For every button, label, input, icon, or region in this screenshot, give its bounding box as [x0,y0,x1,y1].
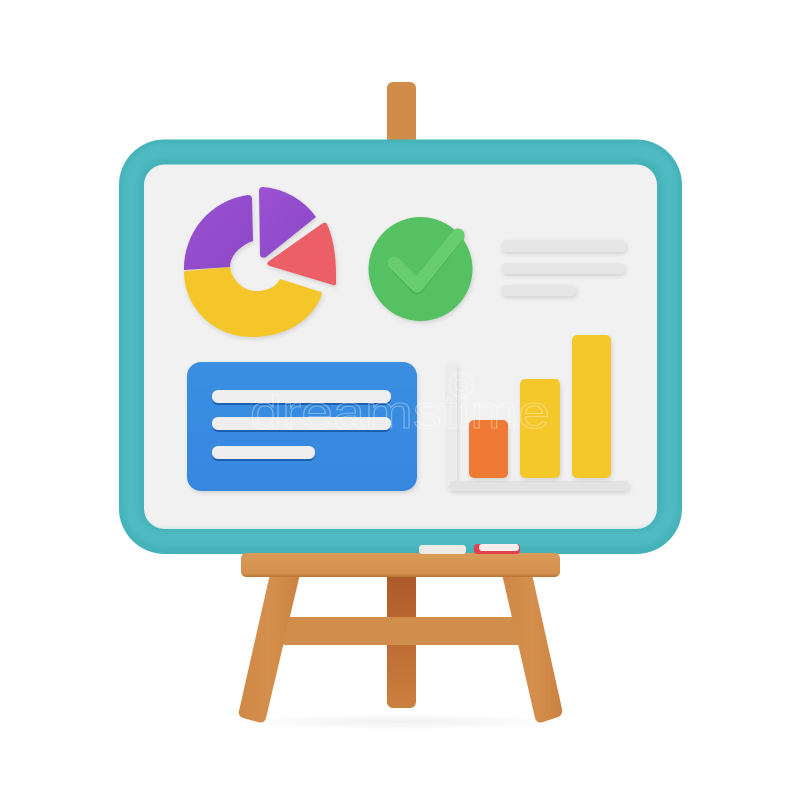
purple left segment [184,195,253,270]
donut pie chart [184,187,336,337]
crossbar [283,617,519,645]
blue text card [187,362,417,491]
easel legs and crossbar [239,570,562,722]
right text placeholder lines [501,240,626,296]
left leg [239,574,300,722]
watermark: dreamstime [250,386,550,438]
right leg [502,574,562,722]
red chalk [474,544,520,554]
easel shelf [241,553,560,577]
red segment [267,223,336,285]
centre leg [387,570,416,708]
watermark [250,373,550,438]
bars [469,335,611,478]
chart axes [447,363,629,491]
bar chart [447,335,629,491]
green check badge [368,217,472,321]
easel top post [387,82,416,144]
check mark [394,235,458,288]
purple right segment [259,187,316,258]
yellow segment [184,267,322,337]
card text lines [212,390,391,461]
floor shadow [230,714,570,730]
whiteboard surface [136,156,666,538]
white chalk [419,545,466,554]
whiteboard frame [131,151,670,542]
